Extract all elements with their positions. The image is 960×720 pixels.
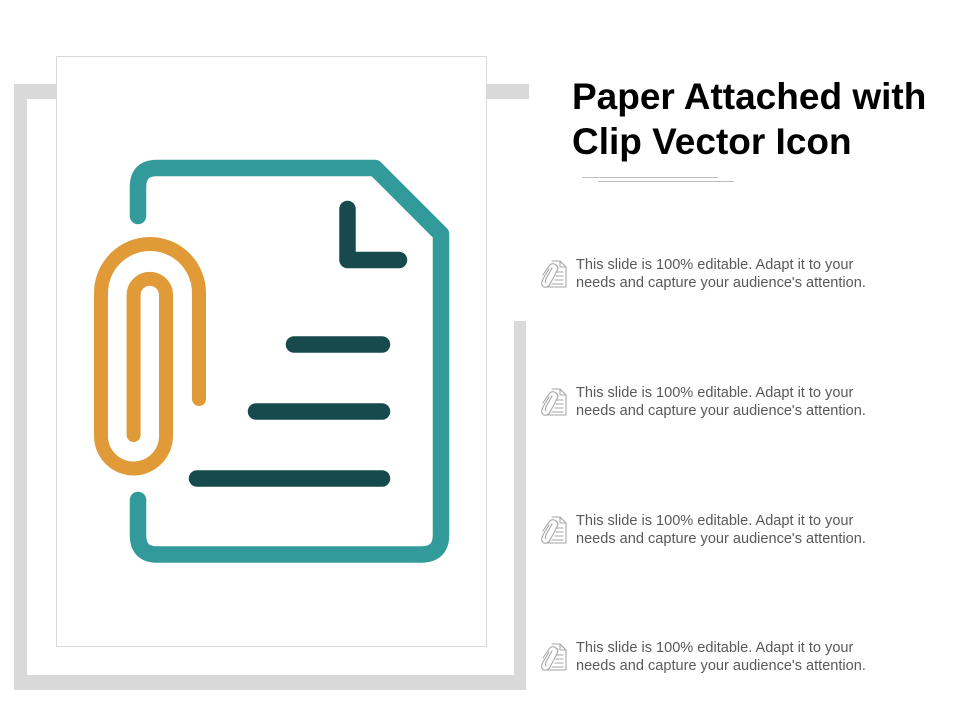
text line 3 — [197, 470, 382, 487]
text line 2 — [256, 403, 382, 420]
folded corner mark — [348, 209, 399, 260]
title — [572, 76, 926, 162]
text block 2: This slide is 100% editable. Adapt it to your — [576, 385, 853, 401]
text block 3: needs and capture your audience's attention. — [576, 531, 866, 547]
text block 1 — [576, 257, 866, 291]
text block 2: needs and capture your audience's attention. — [576, 403, 866, 419]
text block 4: This slide is 100% editable. Adapt it to your — [576, 640, 853, 656]
title: Paper Attached with — [572, 76, 926, 117]
text block 4 — [576, 640, 866, 674]
text block 4: needs and capture your audience's attention. — [576, 658, 866, 674]
text block 2 — [576, 385, 866, 419]
text block 1: This slide is 100% editable. Adapt it to your — [576, 257, 853, 273]
text block 3: This slide is 100% editable. Adapt it to your — [576, 513, 853, 529]
text line 1 — [294, 336, 382, 353]
text block 1: needs and capture your audience's attention. — [576, 275, 866, 291]
text block 3 — [576, 513, 866, 547]
document outline — [138, 168, 441, 554]
title: Clip Vector Icon — [572, 121, 852, 162]
paper clip — [101, 244, 199, 468]
